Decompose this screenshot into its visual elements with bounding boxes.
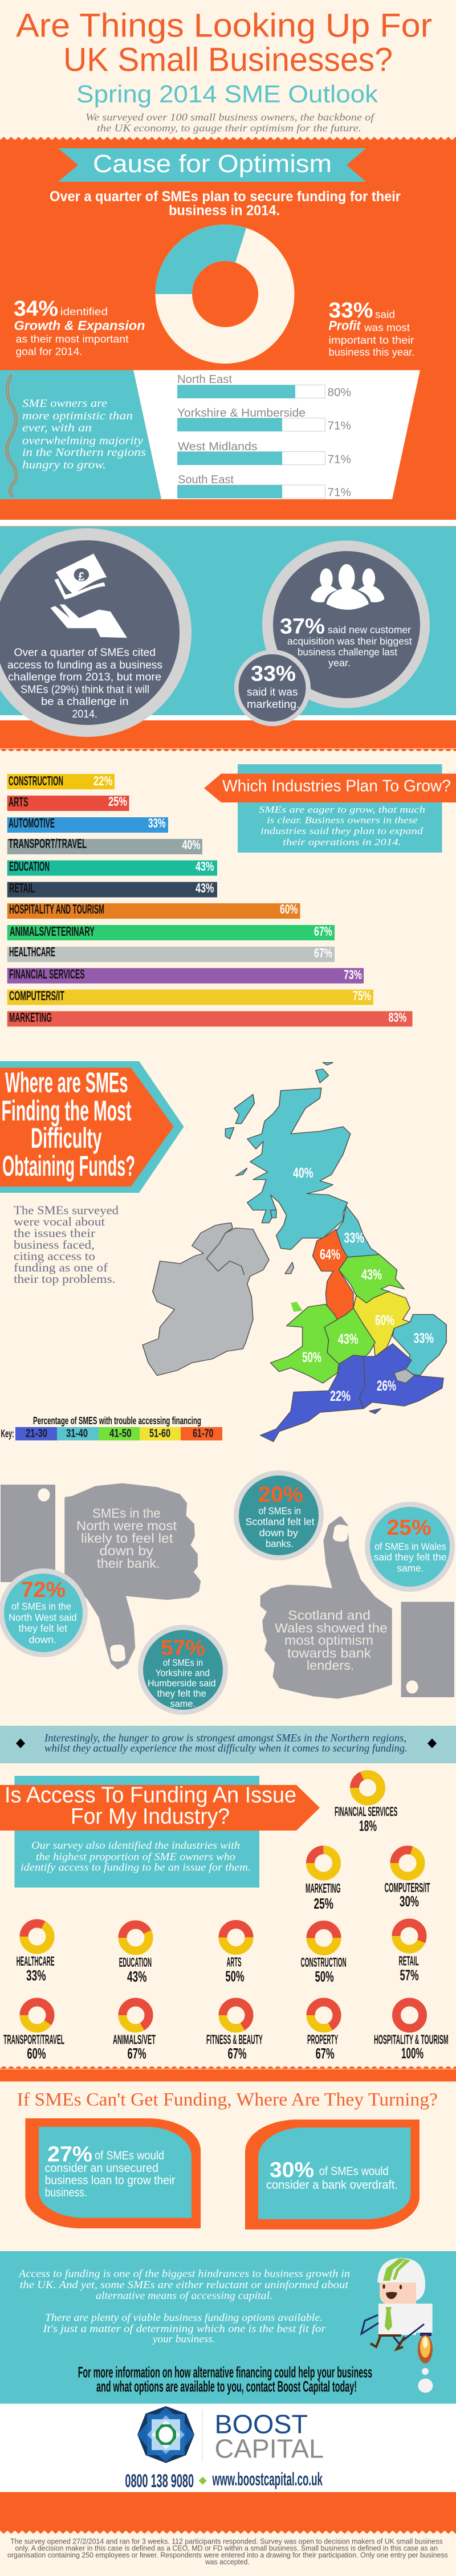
arrow heading: Difficulty xyxy=(31,1122,102,1154)
map values: 64% xyxy=(320,1247,340,1263)
arrow heading: Finding the Most xyxy=(1,1095,132,1127)
map legend: 41-50 xyxy=(109,1428,132,1440)
icon: diamond right xyxy=(427,1738,437,1748)
subtitle: Spring 2014 SME Outlook xyxy=(76,81,378,108)
funding text: SMEs (29%) think that it will xyxy=(21,684,149,696)
panel: access to funding by industry: CONSTRUCTION xyxy=(301,1955,347,1970)
funding circle xyxy=(0,528,192,737)
heading box: Is Access To Funding An Issue xyxy=(5,1783,296,1808)
region: East Midlands xyxy=(353,1291,410,1356)
donut: financial services: 18% xyxy=(359,1817,377,1835)
bar: arts: ARTS xyxy=(9,794,28,809)
callout: 57 percent: same. xyxy=(170,1699,196,1709)
optimism note: more optimistic than xyxy=(22,410,133,422)
closing text: the UK. And yet, some SMEs are either reluctant or uninformed about xyxy=(20,2279,349,2291)
note text: Interestingly, the hunger to grow is strongest amongst SMEs in the Northern regions, xyxy=(44,1733,406,1744)
card: bank overdraft: of SMEs would xyxy=(319,2165,389,2178)
donut: transport xyxy=(3,2002,64,2062)
callout: 72 percent: of SMEs in the xyxy=(11,1600,71,1612)
bar: automotive xyxy=(7,816,168,833)
marketing circle: marketing. xyxy=(247,699,300,711)
bar: computers: COMPUTERS/IT xyxy=(9,988,64,1003)
customer acquisition circle xyxy=(262,540,430,708)
stat: growth: 34% xyxy=(14,297,58,321)
funding text: be a challenge in xyxy=(41,696,129,708)
card: unsecured loan: consider an unsecured xyxy=(45,2162,158,2175)
bar: hospitality: HOSPITALITY AND TOURISM xyxy=(9,902,104,916)
donut: computers: 30% xyxy=(400,1893,419,1910)
stat: profit: was most xyxy=(364,322,410,333)
bar: automotive: AUTOMOTIVE xyxy=(9,816,55,830)
map legend: Key: xyxy=(1,1428,14,1440)
card: bank overdraft xyxy=(245,2120,420,2229)
callout: 72 percent xyxy=(0,1568,88,1657)
map values: 40% xyxy=(293,1165,314,1181)
bar: marketing: 83% xyxy=(389,1010,407,1025)
callout: 72 percent: they felt let xyxy=(19,1623,67,1634)
title: UK Small Businesses? xyxy=(63,41,393,79)
callout: 57 percent: Humberside said xyxy=(148,1678,216,1689)
funding text: challenge from 2013, but more xyxy=(8,671,161,683)
heading: If SMEs Can't Get Funding, Where Are They Turning? xyxy=(17,2089,438,2110)
header xyxy=(16,7,432,134)
icon: thumbs up xyxy=(262,1518,454,1697)
footnote: only. A decision maker in this case is defined as a CEO, MD or FD within a small business. Small business is defined in this case as an xyxy=(15,2544,438,2552)
intro paragraph xyxy=(14,1204,119,1286)
card: bank overdraft: consider a bank overdraft. xyxy=(266,2179,398,2192)
arrow heading: Obtaining Funds? xyxy=(2,1150,135,1182)
donut chart xyxy=(155,225,294,364)
donut: fitness xyxy=(206,2002,263,2062)
customer text xyxy=(280,615,412,669)
closing text: Access to funding is one of the biggest hindrances to business growth in xyxy=(18,2268,350,2280)
map legend: 31-40 xyxy=(66,1428,88,1440)
footnote: organisation containing 250 employees or fewer. Respondents were entered into a drawing for their participation. Only one entry per business xyxy=(7,2551,448,2559)
funding headline xyxy=(50,189,401,219)
callout: 72 percent: down. xyxy=(28,1634,56,1645)
card: unsecured loan: 27% xyxy=(47,2143,92,2167)
region: South West xyxy=(260,1355,365,1442)
region: Scotland xyxy=(225,1062,351,1250)
bar: Yorkshire and Humberside: Yorkshire & Humberside xyxy=(177,407,306,419)
callout: 57 percent xyxy=(138,1625,228,1715)
map values xyxy=(293,1165,434,1404)
donut: education xyxy=(119,1925,152,1985)
ribbon heading: Cause for Optimism xyxy=(93,150,332,178)
callout: 57 percent: they felt the xyxy=(157,1689,206,1699)
callout: 20 percent: banks. xyxy=(266,1538,294,1550)
donut: construction: 50% xyxy=(315,1968,334,1985)
contact details: www.boostcapital.co.uk xyxy=(212,2469,323,2489)
donut: construction xyxy=(301,1925,347,1985)
region: North East xyxy=(335,1205,380,1257)
bar: education: 43% xyxy=(196,859,214,874)
callout: which industries: SMEs are eager to grow, that much xyxy=(259,804,425,815)
callout: 57 percent: of SMEs in xyxy=(163,1658,203,1668)
panel: access to funding by industry xyxy=(0,1775,449,2062)
heading box: Our survey also identified the industries with xyxy=(31,1840,240,1852)
bar: South East: 71% xyxy=(327,487,351,499)
stat: profit xyxy=(328,299,415,358)
panel: where are they turning xyxy=(17,2089,438,2229)
optimism note: hungry to grow. xyxy=(22,459,106,471)
donut: arts xyxy=(223,1924,249,1985)
logo divider xyxy=(202,2410,203,2461)
icon: thumbs down xyxy=(1,1485,199,1668)
marketing circle xyxy=(234,650,311,726)
thumbs up text: most optimism xyxy=(284,1633,373,1648)
panel: industries bar chart xyxy=(7,764,456,1026)
bar: hospitality: 60% xyxy=(280,902,298,916)
map values: 43% xyxy=(338,1331,358,1347)
funding headline: business in 2014. xyxy=(169,203,280,219)
panel: access to funding by industry: MARKETING xyxy=(306,1881,341,1896)
donut: computers xyxy=(384,1850,430,1910)
donut: arts: ARTS xyxy=(227,1955,242,1970)
funding text xyxy=(7,647,162,720)
stat: growth xyxy=(14,297,145,357)
intro text: the UK economy, to gauge their optimism for the future. xyxy=(97,123,361,134)
stat: profit: 33% xyxy=(328,299,373,323)
icon: rocket man xyxy=(361,2258,433,2392)
title: Are Things Looking Up For xyxy=(16,7,432,44)
map of UK and Ireland xyxy=(142,1062,446,1442)
map legend xyxy=(1,1415,222,1440)
map legend: 21-30 xyxy=(26,1428,47,1440)
callout: 72 percent: North West said xyxy=(9,1612,77,1623)
thumbs up text: Wales showed the xyxy=(275,1621,388,1636)
callout: which industries: Which Industries Plan To Grow? xyxy=(222,777,451,796)
bar: construction: CONSTRUCTION xyxy=(9,773,63,788)
bar: North East: North East xyxy=(177,373,232,386)
region: North West xyxy=(312,1229,353,1319)
closing text: There are plenty of viable business funding options available. xyxy=(45,2312,323,2324)
optimism note: in the Northern regions xyxy=(22,446,146,459)
callout: 20 percent: of SMEs in xyxy=(259,1505,301,1517)
squiggle xyxy=(7,376,17,496)
closing text: It's just a matter of determining which one is the best fit for xyxy=(42,2323,326,2335)
donut: retail xyxy=(396,1923,422,1984)
bar: West Midlands xyxy=(177,441,351,466)
bar: healthcare: HEALTHCARE xyxy=(9,944,55,959)
map values: 26% xyxy=(377,1378,396,1394)
donut: healthcare: 33% xyxy=(26,1967,46,1984)
callout: 57 percent: Yorkshire and xyxy=(155,1668,210,1678)
footnote: The survey opened 27/2/2014 and ran for 3 weeks. 112 participants responded. Survey was open to decision makers of UK small business xyxy=(10,2537,442,2545)
intro text xyxy=(85,111,376,134)
region: Ireland xyxy=(142,1223,269,1376)
intro paragraph: were vocal about xyxy=(14,1215,105,1229)
marketing circle: said it was xyxy=(247,686,298,699)
panel: thumbs down and up xyxy=(0,1470,455,1715)
bar: transport: 40% xyxy=(182,837,201,852)
stat: growth: Growth & Expansion xyxy=(14,318,145,333)
bar: North East xyxy=(177,373,351,399)
card: unsecured loan: business. xyxy=(45,2186,87,2199)
bar: computers: 75% xyxy=(353,988,371,1003)
panel: access to funding by industry: PROPERTY xyxy=(307,2032,338,2047)
map values: 33% xyxy=(344,1230,364,1246)
customer text: acquisition was their biggest xyxy=(287,635,412,647)
banner: hunger to grow note xyxy=(0,1726,456,1763)
intro paragraph: The SMEs surveyed xyxy=(14,1204,119,1217)
thumbs down text: SMEs in the xyxy=(92,1506,161,1521)
map values: 22% xyxy=(330,1388,351,1404)
note text xyxy=(44,1733,408,1754)
heading box: the highest proportion of SME owners who xyxy=(36,1851,235,1863)
optimism note: overwhelming majority xyxy=(22,434,143,447)
panel: where are SMEs finding difficulty xyxy=(0,1061,446,1442)
optimism note: SME owners are xyxy=(22,397,107,410)
bar: South East xyxy=(177,474,351,499)
bar: North East: 80% xyxy=(327,386,351,399)
stat: growth: as their most important xyxy=(16,333,129,345)
customer text: year. xyxy=(328,657,351,669)
footnote xyxy=(7,2537,448,2566)
callout: which industries: industries said they plan to expand xyxy=(260,826,424,837)
bar: animals: ANIMALS/VETERINARY xyxy=(10,924,95,939)
card: unsecured loan: business loan to grow their xyxy=(45,2174,176,2187)
region: South East xyxy=(358,1344,443,1413)
optimism note: ever, with an xyxy=(22,422,92,434)
bar: arts xyxy=(7,794,129,811)
call to action xyxy=(78,2364,372,2395)
thumbs down text: likely to feel let xyxy=(81,1531,173,1546)
panel: access to funding by industry: HEALTHCARE xyxy=(17,1954,54,1968)
donut: property xyxy=(307,2002,338,2062)
thumbs down text: North were most xyxy=(76,1518,177,1533)
donut: arts: 50% xyxy=(225,1968,245,1985)
callout: 25 percent xyxy=(365,1502,455,1592)
panel: cause for optimism xyxy=(0,137,456,520)
donut: animals xyxy=(113,2002,156,2062)
contact details xyxy=(125,2469,323,2491)
thumbs down text xyxy=(76,1506,177,1571)
card: unsecured loan xyxy=(25,2118,201,2228)
intro paragraph: business faced, xyxy=(14,1238,95,1252)
map values: 60% xyxy=(375,1313,394,1328)
arrow heading: Where are SMEs xyxy=(5,1067,128,1099)
closing text xyxy=(18,2268,350,2345)
region: Isle of Man xyxy=(285,1262,294,1274)
thumbs up text xyxy=(275,1608,388,1673)
thumbs down text: their bank. xyxy=(97,1556,160,1571)
funding text: access to funding as a business xyxy=(7,659,162,671)
bar: education xyxy=(7,859,217,876)
intro paragraph: funding as one of xyxy=(14,1261,108,1274)
intro text: We surveyed over 100 small business owners, the backbone of xyxy=(85,111,376,123)
arrow heading xyxy=(0,1061,184,1193)
donut: transport: 60% xyxy=(27,2045,46,2062)
bar: construction: 22% xyxy=(93,773,113,788)
region: Yorkshire xyxy=(339,1254,404,1303)
heading box xyxy=(0,1776,320,1888)
card: bank overdraft: 30% xyxy=(270,2158,314,2182)
customer text: business challenge last xyxy=(298,646,397,658)
orange divider xyxy=(0,2066,456,2081)
donut: retail: RETAIL xyxy=(399,1954,419,1968)
map legend: Percentage of SMES with trouble accessing financing xyxy=(33,1415,201,1426)
bar: healthcare: 67% xyxy=(314,945,332,960)
map values: 43% xyxy=(361,1267,382,1283)
panel: access to funding by industry: ANIMALS/VET xyxy=(113,2032,156,2047)
donut: animals: 67% xyxy=(128,2045,146,2062)
donut: marketing: 25% xyxy=(314,1895,333,1912)
callout: 20 percent: down by xyxy=(259,1527,298,1539)
region: West Midlands xyxy=(324,1308,375,1364)
icon: banknote and hand xyxy=(50,553,127,638)
callout: 25 percent: said they felt the xyxy=(374,1551,447,1563)
funding text: 2014. xyxy=(72,708,97,720)
heading box: For My Industry? xyxy=(71,1804,230,1829)
callout: 20 percent xyxy=(234,1470,324,1560)
callout: which industries: is clear. Business owners in these xyxy=(267,815,418,826)
thumbs down text: down by xyxy=(99,1543,154,1558)
ribbon heading xyxy=(58,148,366,182)
customer text: 37% xyxy=(280,615,325,639)
panel: access to funding by industry: FITNESS & BEAUTY xyxy=(206,2032,263,2047)
stat: profit: said xyxy=(375,309,395,320)
donut: hospitality xyxy=(374,2002,449,2062)
intro paragraph: their top problems. xyxy=(14,1272,115,1286)
region: London xyxy=(394,1369,414,1383)
logo wordmark xyxy=(214,2409,324,2463)
donut: property: 67% xyxy=(316,2045,335,2062)
callout: 20 percent: 20% xyxy=(258,1483,303,1507)
panel: business challenges xyxy=(0,520,456,751)
marketing circle: 33% xyxy=(251,662,296,686)
bar: retail: 43% xyxy=(196,881,214,895)
panel: access to funding by industry: TRANSPORT/TRAVEL xyxy=(3,2032,64,2047)
funding text: Over a quarter of SMEs cited xyxy=(14,647,156,659)
logo wordmark: BOOST xyxy=(214,2409,308,2439)
donut: marketing xyxy=(306,1850,341,1912)
bar: animals xyxy=(7,924,335,940)
card: unsecured loan: of SMEs would xyxy=(95,2149,164,2162)
donut: financial services xyxy=(335,1775,397,1835)
optimism note xyxy=(22,397,146,471)
icon: people xyxy=(311,564,384,610)
stat: profit: important to their xyxy=(328,335,414,346)
bar: financial services: 73% xyxy=(344,967,362,982)
thumbs up text: lenders. xyxy=(307,1658,354,1673)
callout: 25 percent: 25% xyxy=(387,1516,431,1540)
callout: which industries xyxy=(204,764,456,853)
funding headline: Over a quarter of SMEs plan to secure funding for their xyxy=(50,189,401,205)
thumbs up text: towards bank xyxy=(287,1646,372,1661)
callout: 20 percent: Scotland felt let xyxy=(246,1516,315,1527)
donut: education: 43% xyxy=(127,1968,147,1985)
closing text: alternative means of accessing capital. xyxy=(96,2290,272,2302)
bar: hospitality xyxy=(7,902,300,919)
map values: 33% xyxy=(414,1330,434,1346)
icon: banknote and hand: £ xyxy=(78,570,85,584)
stat: profit: business this year. xyxy=(328,347,415,358)
customer text: said new customer xyxy=(328,624,411,635)
bar: transport: TRANSPORT/TRAVEL xyxy=(9,836,87,851)
contact details: 0800 138 9080 xyxy=(125,2471,194,2491)
thumbs up text: Scotland and xyxy=(288,1608,370,1623)
bar: healthcare xyxy=(7,944,335,962)
bar: marketing xyxy=(7,1010,412,1026)
callout: 72 percent: 72% xyxy=(21,1578,66,1602)
donut: retail: 57% xyxy=(400,1967,419,1984)
stat: growth: identified xyxy=(60,306,108,317)
heading box: identify access to funding to be an issue for them. xyxy=(21,1862,251,1874)
callout: 25 percent: same. xyxy=(397,1563,424,1574)
callout: which industries: their operations in 2014. xyxy=(283,837,401,847)
bar: financial services xyxy=(7,967,364,984)
panel: access to funding by industry: EDUCATION xyxy=(119,1955,152,1970)
title xyxy=(16,7,432,79)
bar: West Midlands: West Midlands xyxy=(178,441,258,453)
donut: healthcare xyxy=(17,1923,54,1984)
stat: growth: goal for 2014. xyxy=(16,346,82,357)
logo wordmark: CAPITAL xyxy=(214,2434,324,2463)
bar: Yorkshire and Humberside xyxy=(177,407,351,432)
intro paragraph: the issues their xyxy=(14,1226,95,1240)
bar: animals: 67% xyxy=(314,924,332,939)
bar: South East: South East xyxy=(178,474,234,486)
bar: education: EDUCATION xyxy=(9,859,50,874)
intro paragraph: citing access to xyxy=(14,1249,95,1263)
icon: diamond left xyxy=(16,1738,25,1748)
panel: closing message xyxy=(0,2251,456,2404)
map legend: 61-70 xyxy=(193,1428,213,1440)
callout: 57 percent: 57% xyxy=(161,1636,205,1660)
regional optimism panel xyxy=(0,370,420,499)
region: Wales xyxy=(270,1302,339,1383)
panel: Boost Capital logo and contact xyxy=(0,2404,456,2492)
bar: West Midlands: 71% xyxy=(327,454,351,466)
stat: profit: Profit xyxy=(328,318,361,333)
icon: logo gem xyxy=(137,2406,194,2463)
closing text: your business. xyxy=(152,2333,215,2345)
bar: Yorkshire and Humberside: 71% xyxy=(327,419,351,432)
bar: arts: 25% xyxy=(108,794,127,809)
bar: retail xyxy=(7,881,217,897)
map legend: 51-60 xyxy=(149,1428,170,1440)
note text: whilst they actually experience the most difficulty when it comes to securing funding. xyxy=(44,1743,408,1754)
bar: transport xyxy=(7,836,202,854)
donut: fitness: 67% xyxy=(228,2045,247,2062)
callout: 25 percent: of SMEs in Wales xyxy=(374,1541,446,1552)
footnote: was accepted. xyxy=(205,2558,250,2566)
donut: hospitality: 100% xyxy=(401,2045,424,2062)
bar: retail: RETAIL xyxy=(9,881,35,895)
bar: computers xyxy=(7,988,373,1005)
bar: financial services: FINANCIAL SERVICES xyxy=(9,967,84,981)
footer band xyxy=(0,2492,456,2534)
bar: automotive: 33% xyxy=(148,816,165,830)
map values: 50% xyxy=(302,1350,321,1366)
region: East of England xyxy=(393,1314,446,1376)
bar: marketing: MARKETING xyxy=(9,1010,52,1025)
